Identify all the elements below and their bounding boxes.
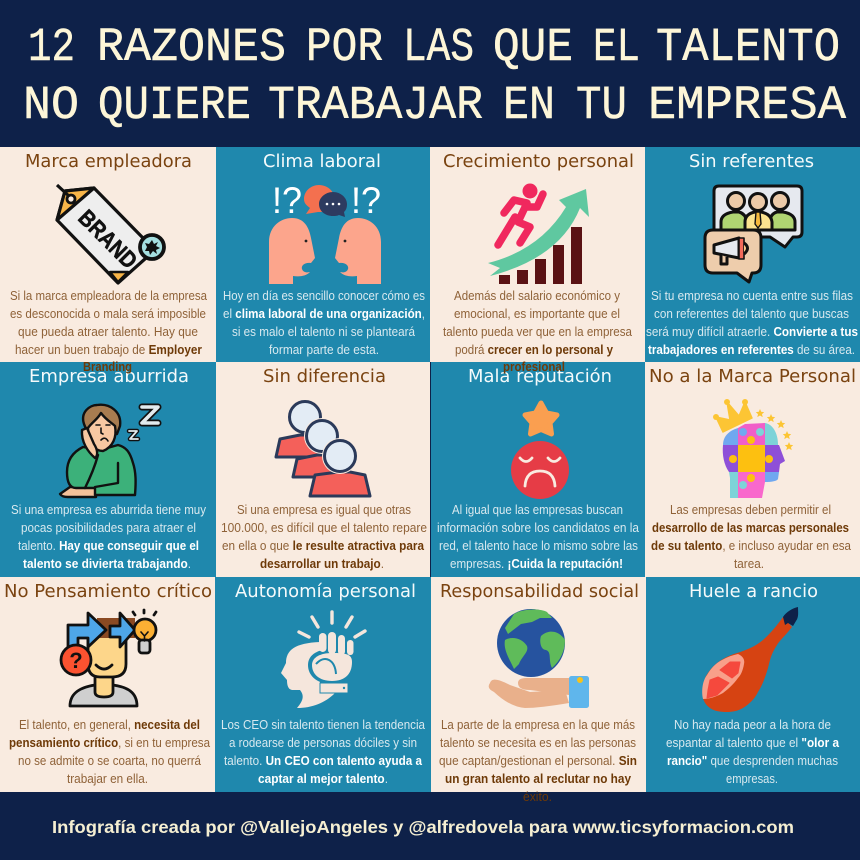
- text block: [666, 717, 840, 786]
- text block: pocas posibilidades para atraer el: [21, 520, 196, 535]
- icon: bored person: [60, 405, 158, 497]
- icon: brand tag: BRAND: [73, 204, 143, 274]
- title: 12: [28, 22, 75, 75]
- text block: [11, 502, 206, 571]
- overflow text: éxito: éxito.: [523, 789, 552, 804]
- text block: información sobre los candidatos en la: [437, 520, 640, 535]
- text block: empresas. ¡Cuida la reputación!: [450, 556, 623, 571]
- icon: raised fist and head: [281, 612, 365, 708]
- text block: que captan/gestionan el personal. Sin: [439, 753, 637, 768]
- text block: un gran talento al reclutar no hay: [445, 771, 632, 786]
- title: EL: [593, 22, 640, 75]
- text block: hacer un buen trabajo de Employer: [15, 342, 202, 357]
- icon: referents and megaphone: [705, 186, 802, 282]
- text block: 100.000, es difícil que el talento repare: [221, 520, 427, 535]
- text block: desarrollar un trabajo.: [260, 556, 384, 571]
- text block: Los CEO sin talento tienen la tendencia: [221, 717, 426, 732]
- icon: runner on growth chart: [488, 184, 589, 284]
- text block: es desconocida o mala será imposible: [10, 306, 206, 321]
- text block: El talento, en general, necesita del: [19, 717, 200, 732]
- icon: two heads talking: !?: [272, 180, 302, 221]
- icon: three identical people: [276, 402, 370, 496]
- panel: Responsabilidad social: [431, 577, 647, 792]
- icon: puzzle head with crown: [713, 399, 793, 498]
- text block: Si una empresa es aburrida tiene muy: [11, 502, 206, 517]
- text block: no se admite o se coarta, no querrá: [18, 753, 202, 768]
- overflow text: Branding: Branding: [83, 359, 132, 374]
- text block: [439, 717, 637, 786]
- text block: el clima laboral de una organización,: [223, 306, 425, 321]
- panel: Autonomía personal: [215, 577, 431, 792]
- text block: talento se necesita es en las personas: [440, 735, 636, 750]
- icon: ham leg: [702, 607, 798, 712]
- text block: [443, 288, 633, 357]
- heading: Crecimiento personal: [443, 152, 634, 172]
- title: QUE: [493, 22, 573, 75]
- footer band: [0, 792, 860, 860]
- title: EN: [503, 80, 555, 133]
- text block: pensamiento crítico, si en tu empresa: [9, 735, 211, 750]
- text block: Si la marca empleadora de la empresa: [10, 288, 208, 303]
- title: TU: [576, 80, 627, 133]
- panel: Mala reputación: [431, 362, 645, 577]
- text block: red, el talento hace lo mismo sobre las: [439, 538, 638, 553]
- heading: Empresa aburrida: [29, 367, 189, 387]
- heading: Huele a rancio: [689, 582, 818, 602]
- text block: podrá crecer en lo personal y: [455, 342, 614, 357]
- text block: [10, 288, 208, 357]
- text block: Además del salario económico y: [454, 288, 620, 303]
- title: EMPRESA: [648, 80, 847, 133]
- title: RAZONES: [97, 22, 286, 75]
- panel: Crecimiento personal: [430, 147, 645, 362]
- text block: que pueda atraer talento. Hay que: [18, 324, 198, 339]
- icon: sad face and star: [511, 403, 569, 499]
- panel: Sin diferencia: [216, 362, 430, 577]
- title: [23, 22, 847, 133]
- title: NO: [23, 80, 79, 133]
- text block: [221, 717, 426, 786]
- text block: trabajadores en referentes de su área.: [648, 342, 855, 357]
- icon: brand tag: [57, 185, 164, 283]
- panel: Huele a rancio: [646, 577, 860, 792]
- text block: La parte de la empresa en la que más: [441, 717, 635, 732]
- panel: Empresa aburrida: [0, 362, 216, 577]
- text block: [221, 502, 427, 571]
- icon: head with arrows, question and bulb: ?: [69, 648, 83, 673]
- heading: Autonomía personal: [235, 582, 416, 602]
- text block: [651, 502, 852, 571]
- text block: talento. Un CEO con talento ayuda a: [224, 753, 423, 768]
- text block: trabajar en ella.: [67, 771, 148, 786]
- header band: [0, 0, 860, 148]
- text block: si es malo el talento ni se planteará: [232, 324, 416, 339]
- text block: [223, 288, 425, 357]
- text block: talento. Hay que conseguir que el: [18, 538, 199, 553]
- heading: Clima laboral: [263, 152, 381, 172]
- footer credit: Infografía creada por @VallejoAngeles y @alfredovela para www.ticsyformacion.com: [52, 817, 794, 837]
- heading: Marca empleadora: [25, 152, 192, 172]
- title: TALENTO: [656, 22, 840, 75]
- text block: [646, 288, 858, 357]
- icon: head with arrows, question and bulb: [61, 610, 156, 706]
- text block: talento se divierta trabajando.: [23, 556, 191, 571]
- text block: No hay nada peor a la hora de: [674, 717, 831, 732]
- text block: rancio" que desprenden muchas: [667, 753, 838, 768]
- text block: [437, 502, 640, 571]
- text block: talento pueda ver que en la empresa: [443, 324, 633, 339]
- text block: a rodearse de personas dóciles y sin: [229, 735, 417, 750]
- title: TRABAJAR: [268, 80, 483, 133]
- icon: two heads talking: [269, 180, 381, 284]
- text block: emocional, es importante que el: [454, 306, 620, 321]
- text block: Si una empresa es igual que otras: [237, 502, 411, 517]
- panel: No Pensamiento crítico: [0, 577, 215, 792]
- panel: No a la Marca Personal: [645, 362, 860, 577]
- text block: empresas.: [726, 771, 778, 786]
- heading: Sin referentes: [689, 152, 814, 172]
- title: LAS: [403, 22, 474, 75]
- heading: No Pensamiento crítico: [4, 582, 212, 602]
- icon: two heads talking: !?: [351, 180, 381, 221]
- panel: Sin referentes: [645, 147, 860, 362]
- panel: Marca empleadora: [0, 147, 216, 362]
- text block: Al igual que las empresas buscan: [452, 502, 623, 517]
- heading: Mala reputación: [468, 367, 612, 387]
- text block: tarea.: [734, 556, 764, 571]
- heading: Responsabilidad social: [440, 582, 639, 602]
- panel: Clima laboral: [216, 147, 430, 362]
- text block: Las empresas deben permitir el: [670, 502, 831, 517]
- text block: formar parte de esta.: [269, 342, 379, 357]
- text block: Hoy en día es sencillo conocer cómo es: [223, 288, 425, 303]
- heading: Sin diferencia: [263, 367, 386, 387]
- text block: espantar al talento que el "olor a: [666, 735, 840, 750]
- heading: No a la Marca Personal: [649, 367, 856, 387]
- title: QUIERE: [98, 80, 251, 133]
- overflow text: profesional: profesional: [503, 359, 565, 374]
- title: POR: [306, 22, 383, 75]
- text block: [9, 717, 211, 786]
- icon: globe on hand: [489, 609, 589, 708]
- text block: en ella o que le resulte atractiva para: [222, 538, 425, 553]
- text block: captar al mejor talento.: [258, 771, 388, 786]
